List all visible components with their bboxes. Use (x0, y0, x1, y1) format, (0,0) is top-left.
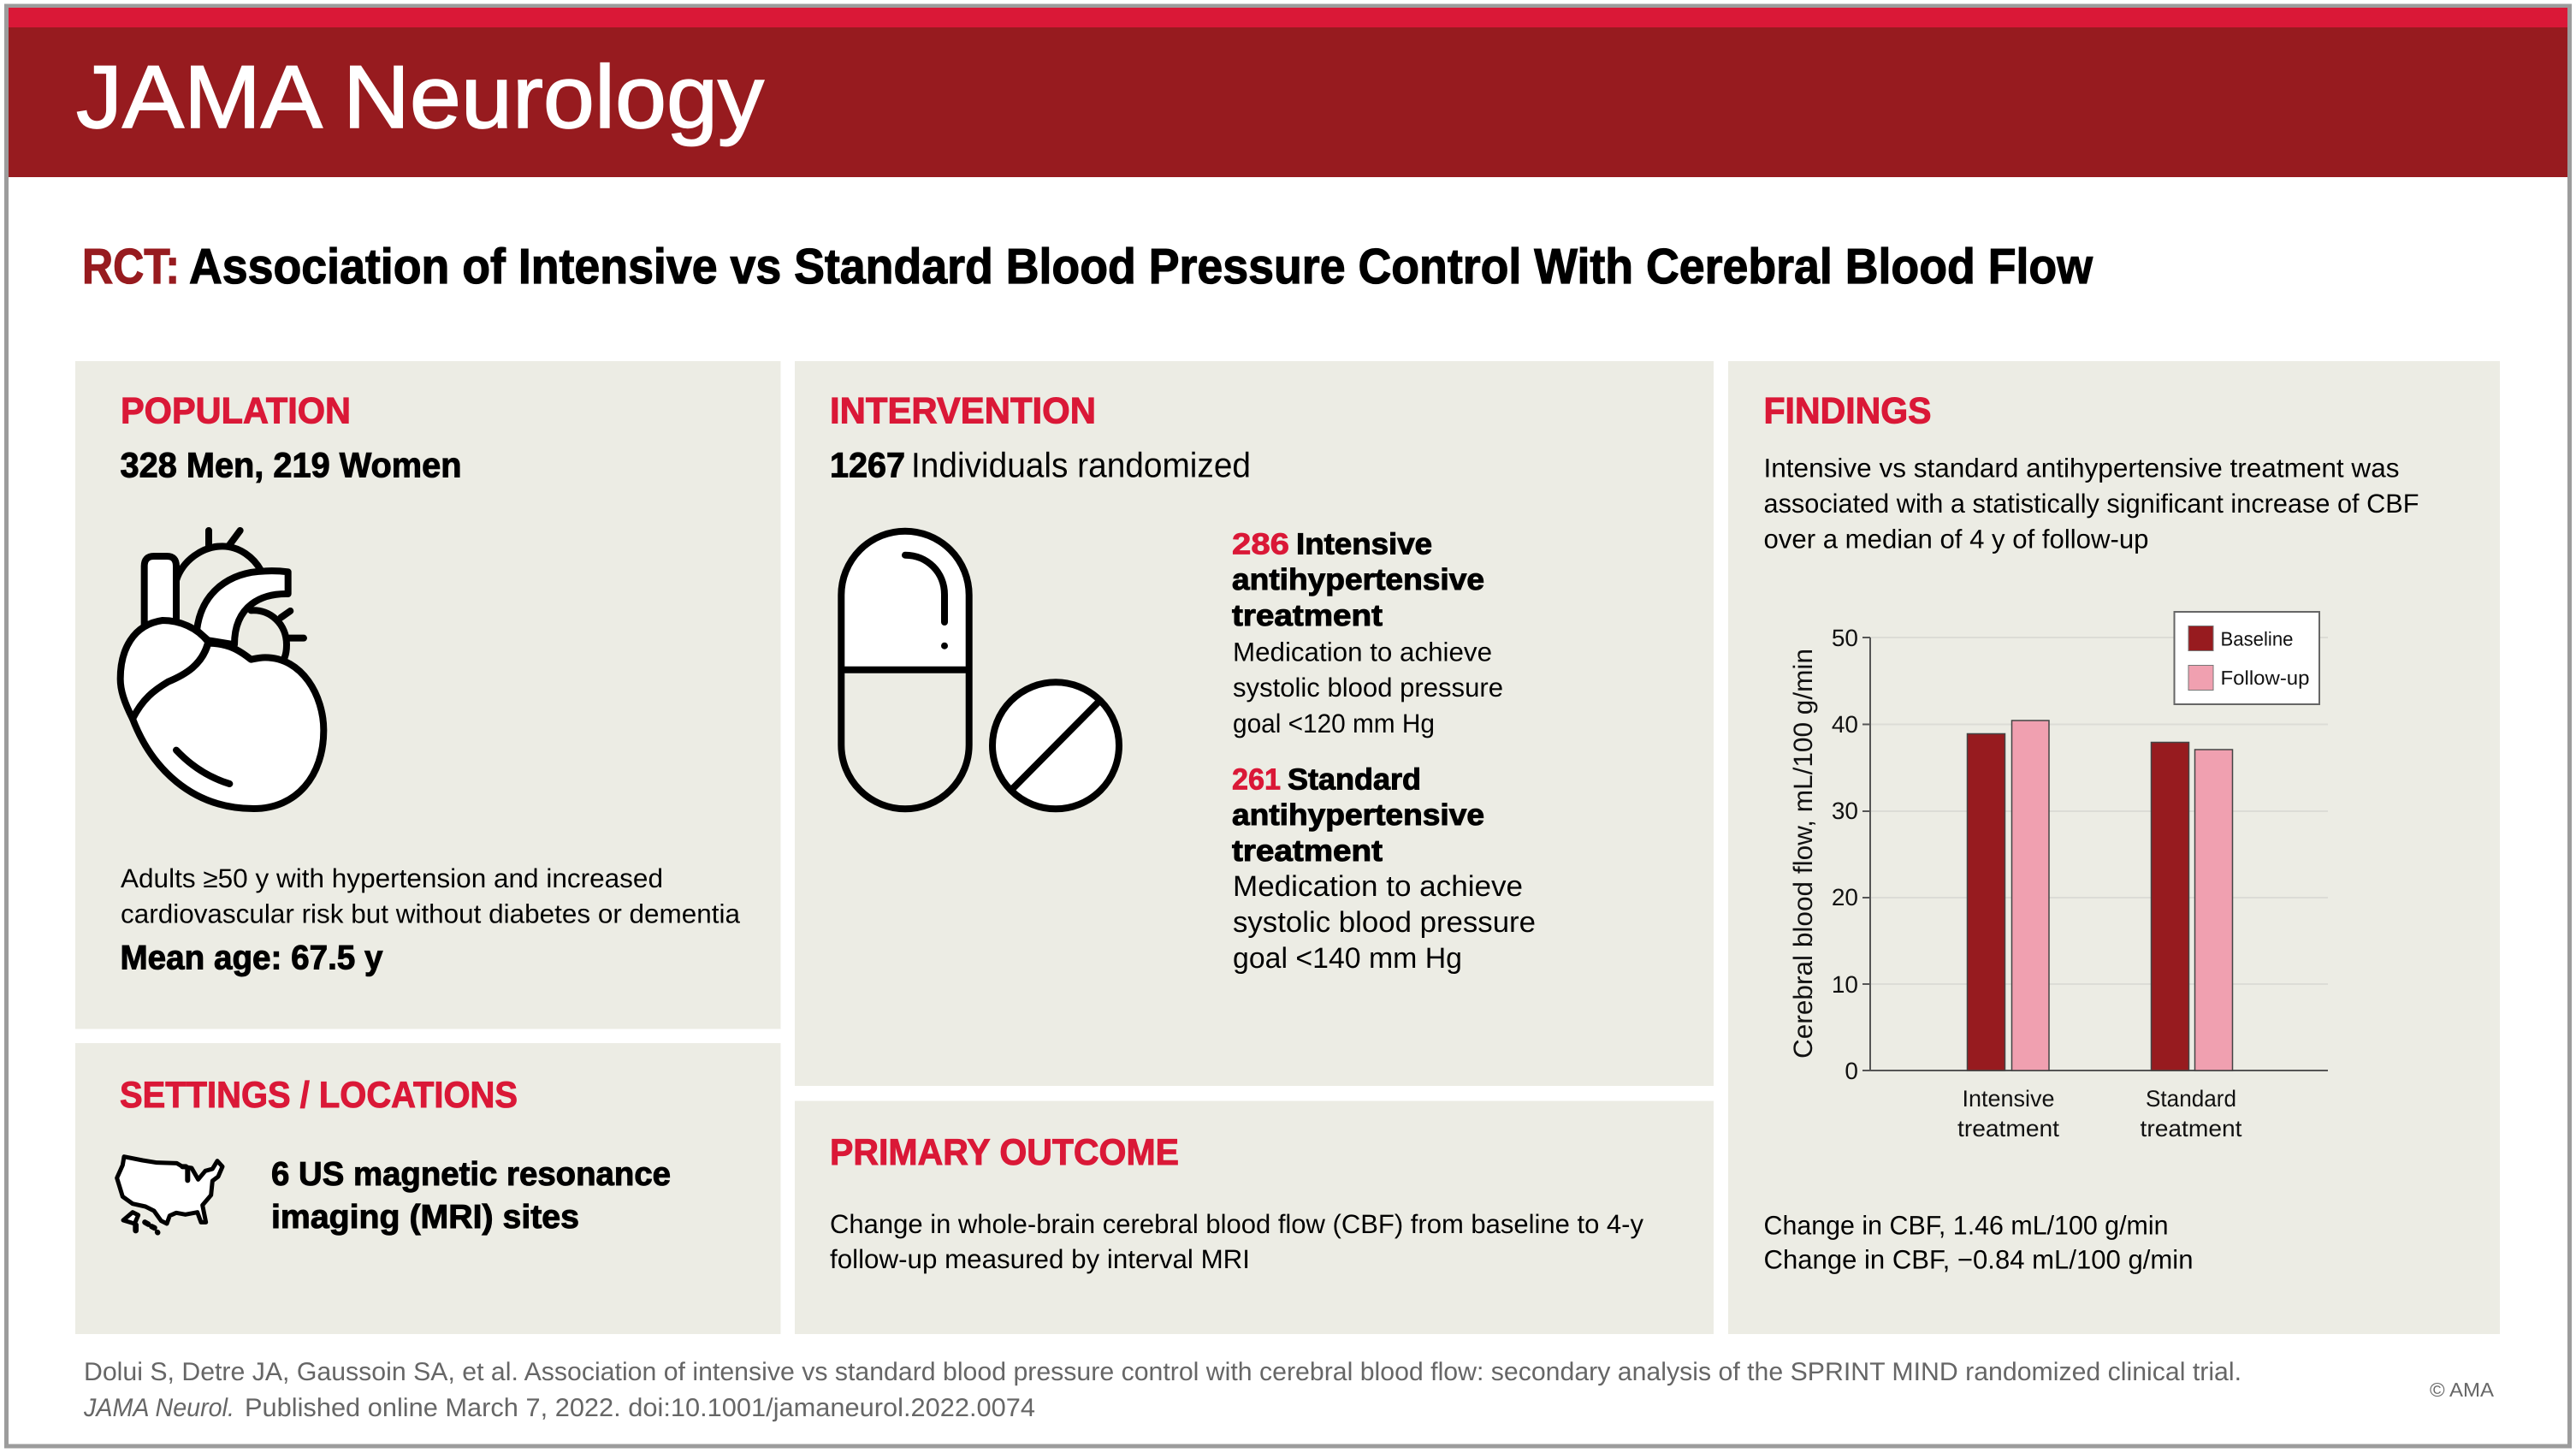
settings text: 6 US magnetic resonance (271, 1156, 671, 1193)
heading: settings: SETTINGS / LOCATIONS (120, 1075, 518, 1116)
bars: intensive treatment (1968, 721, 2049, 1070)
copyright: © AMA (2430, 1379, 2495, 1401)
standard arm: Medication to achieve (1233, 870, 1523, 903)
y axis tick labels: 30 (1832, 798, 1858, 824)
citation (83, 1358, 2241, 1422)
participants count: 328 Men, 219 Women (120, 445, 462, 484)
header banner (9, 8, 2567, 177)
y axis tick labels: 20 (1832, 884, 1858, 910)
x axis label: intensive: Intensive (1963, 1086, 2055, 1112)
settings text: imaging (MRI) sites (271, 1199, 579, 1236)
x axis label: intensive (1957, 1086, 2060, 1142)
population description (121, 863, 741, 929)
icon: capsule and tablet (841, 531, 1119, 809)
title: Association of Intensive vs Standard Blood Pressure Control With Cerebral Blood Flow (189, 239, 2093, 294)
outcome description: follow-up measured by interval MRI (830, 1244, 1250, 1274)
change in CBF results: Change in CBF, −0.84 mL/100 g/min (1764, 1244, 2194, 1275)
standard arm (1232, 763, 1536, 975)
y axis tick labels: 10 (1832, 971, 1858, 998)
standard arm: Standard (1288, 763, 1421, 796)
standard arm: antihypertensive (1232, 798, 1484, 832)
standard arm: systolic blood pressure (1233, 906, 1536, 939)
change in CBF results: Change in CBF, 1.46 mL/100 g/min (1764, 1210, 2168, 1241)
bar chart (1788, 612, 2328, 1142)
findings summary: over a median of 4 y of follow-up (1764, 524, 2149, 555)
standard arm: treatment (1232, 834, 1383, 868)
panel: findings (1728, 361, 2500, 1334)
y axis title: Cerebral blood flow, mL/100 g/min (1788, 649, 1818, 1059)
citation: JAMA Neurol. (83, 1394, 234, 1422)
standard arm: 261 (1232, 763, 1281, 796)
x axis label: standard: treatment (2141, 1116, 2242, 1142)
intensive arm (1232, 527, 1503, 738)
panel: intervention (795, 361, 1714, 1086)
y axis tick labels: 0 (1845, 1058, 1858, 1084)
intensive arm: treatment (1232, 599, 1383, 632)
population description: cardiovascular risk but without diabetes or dementia (121, 898, 741, 929)
citation: Published online March 7, 2022. doi:10.1001/jamaneurol.2022.0074 (245, 1394, 1035, 1422)
heading: population: POPULATION (121, 390, 351, 431)
heading: findings: FINDINGS (1764, 390, 1932, 431)
heading: primary outcome: PRIMARY OUTCOME (830, 1132, 1179, 1173)
y axis tick labels: 40 (1832, 711, 1858, 738)
outcome description (830, 1209, 1643, 1274)
icon: heart (121, 531, 323, 809)
y axis tick labels (1832, 625, 1858, 1084)
legend: Baseline (2221, 628, 2293, 650)
legend (2175, 612, 2319, 704)
findings summary: Intensive vs standard antihypertensive treatment was (1764, 454, 2399, 483)
intensive arm: Medication to achieve (1233, 637, 1492, 667)
axes (1862, 638, 2328, 1070)
citation: Dolui S, Detre JA, Gaussoin SA, et al. Association of intensive vs standard blood pressure control with cerebral blood flow: secondary analysis of the SPRINT MIND randomized clinical trial. (84, 1358, 2241, 1386)
change in CBF results (1764, 1210, 2194, 1275)
intensive arm: goal <120 mm Hg (1233, 709, 1435, 738)
panel: settings and locations (75, 1043, 780, 1334)
intensive arm: antihypertensive (1232, 563, 1484, 596)
outcome description: Change in whole-brain cerebral blood flow (CBF) from baseline to 4-y (830, 1209, 1643, 1239)
intensive arm: Intensive (1296, 527, 1432, 561)
panel: population (75, 361, 780, 1029)
intensive arm: systolic blood pressure (1233, 673, 1503, 703)
x axis label: standard (2141, 1086, 2242, 1142)
panel: primary outcome (795, 1100, 1714, 1334)
x axis label: standard: Standard (2146, 1086, 2236, 1112)
heading: intervention: INTERVENTION (830, 390, 1096, 431)
randomized count: 1267 (830, 445, 905, 484)
population description: Adults ≥50 y with hypertension and increased (121, 863, 663, 893)
icon: US map (117, 1157, 222, 1232)
findings summary: associated with a statistically significant increase of CBF (1764, 489, 2419, 519)
randomized count: Individuals randomized (911, 445, 1251, 484)
mean age: Mean age: 67.5 y (120, 940, 383, 977)
settings text (271, 1156, 671, 1236)
title: RCT: (82, 239, 180, 294)
findings summary (1764, 454, 2419, 555)
bars: standard treatment (2151, 743, 2233, 1070)
journal name: JAMA Neurology (76, 48, 764, 147)
y axis tick labels: 50 (1832, 625, 1858, 651)
intensive arm: 286 (1232, 527, 1289, 561)
x axis label: intensive: treatment (1957, 1116, 2060, 1142)
legend: Follow-up (2221, 667, 2310, 689)
standard arm: goal <140 mm Hg (1233, 942, 1462, 975)
